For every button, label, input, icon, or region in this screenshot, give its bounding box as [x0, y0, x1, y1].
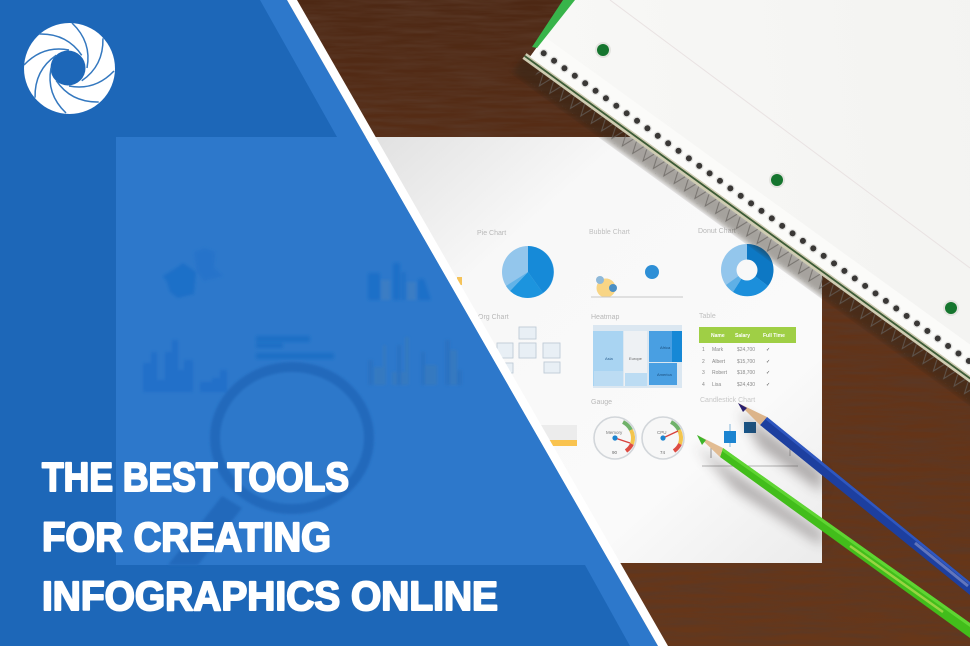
panel: chart paper sheet [340, 137, 822, 563]
chart label: table: Table [699, 313, 716, 320]
title: THE BEST TOOLS [42, 454, 349, 500]
heatmap: Africa [660, 345, 671, 350]
gauge: memory: 90 [612, 450, 618, 455]
data table: Robert [712, 370, 728, 376]
data table: Lisa [712, 382, 721, 388]
ghost: bar chart left [143, 340, 227, 392]
white diagonal stripe [287, 0, 668, 646]
data table: 3 [702, 370, 705, 376]
data table: Full Time [763, 333, 785, 339]
panel: blue diagonal overlay [0, 0, 658, 646]
title: FOR CREATING [42, 514, 331, 560]
gauge: cpu: 74 [660, 450, 666, 455]
data table: ✓ [766, 370, 770, 376]
chart label: bubble chart: Bubble Chart [589, 229, 630, 236]
gauge: memory [594, 417, 636, 459]
pencil shadows [695, 410, 822, 545]
chart label: donut chart: Donut Chart [698, 228, 736, 235]
ghost: map [163, 248, 223, 298]
chart label: org chart: Org Chart [478, 314, 509, 321]
data table: Mark [712, 347, 724, 353]
heatmap [593, 325, 682, 388]
data table: $18,700 [737, 370, 755, 376]
data table: $15,700 [737, 359, 755, 365]
data table: ✓ [766, 347, 770, 353]
gauge: cpu: CPU [657, 430, 667, 435]
donut chart [721, 244, 774, 296]
notebook punched holes [544, 53, 970, 409]
data table: $24,430 [737, 382, 755, 388]
pie chart [502, 246, 554, 298]
notebook wire coils [530, 71, 970, 435]
data table: 1 [702, 347, 705, 353]
data table: $24,700 [737, 347, 755, 353]
data table: Name [711, 333, 725, 339]
green pencil behind notebook [532, 0, 575, 48]
heatmap: America [657, 372, 672, 377]
lighter sheet reflected through overlay [116, 0, 658, 646]
org chart [497, 327, 560, 373]
icon: spiral aperture logo [24, 23, 115, 114]
ghost: horizontal bars [256, 336, 334, 359]
data table: Albert [712, 359, 726, 365]
heatmap: Europe [629, 356, 643, 361]
binder holes [595, 42, 959, 316]
panel: spiral notebook [512, 0, 970, 437]
data table: Salary [735, 333, 750, 339]
title [42, 454, 498, 619]
ghost: bar chart top right [368, 263, 431, 300]
orange bar chart fragment [457, 277, 577, 446]
candlestick chart [702, 422, 798, 466]
data table: 4 [702, 382, 705, 388]
data table: ✓ [766, 382, 770, 388]
data table: 2 [702, 359, 705, 365]
notebook shadow [512, 56, 970, 436]
pencil: green [697, 435, 970, 638]
heatmap: Asia [605, 356, 614, 361]
data table: ✓ [766, 359, 770, 365]
chart label: heatmap: Heatmap [591, 314, 620, 321]
notebook page [530, 0, 970, 420]
chart label: candlestick chart: Candlestick Chart [700, 397, 755, 404]
chart label: pie chart: Pie Chart [477, 230, 506, 237]
gauge: memory: Memory [606, 430, 623, 435]
notebook spine [522, 53, 970, 422]
ghost: magnifying glass [168, 367, 369, 565]
chart label: gauge: Gauge [591, 399, 612, 406]
gauge: cpu [642, 417, 684, 459]
pencil: blue [738, 403, 970, 595]
data table [699, 327, 796, 388]
title: INFOGRAPHICS ONLINE [42, 573, 498, 619]
bubble chart [591, 265, 683, 298]
ghost: grouped bars [368, 337, 462, 385]
